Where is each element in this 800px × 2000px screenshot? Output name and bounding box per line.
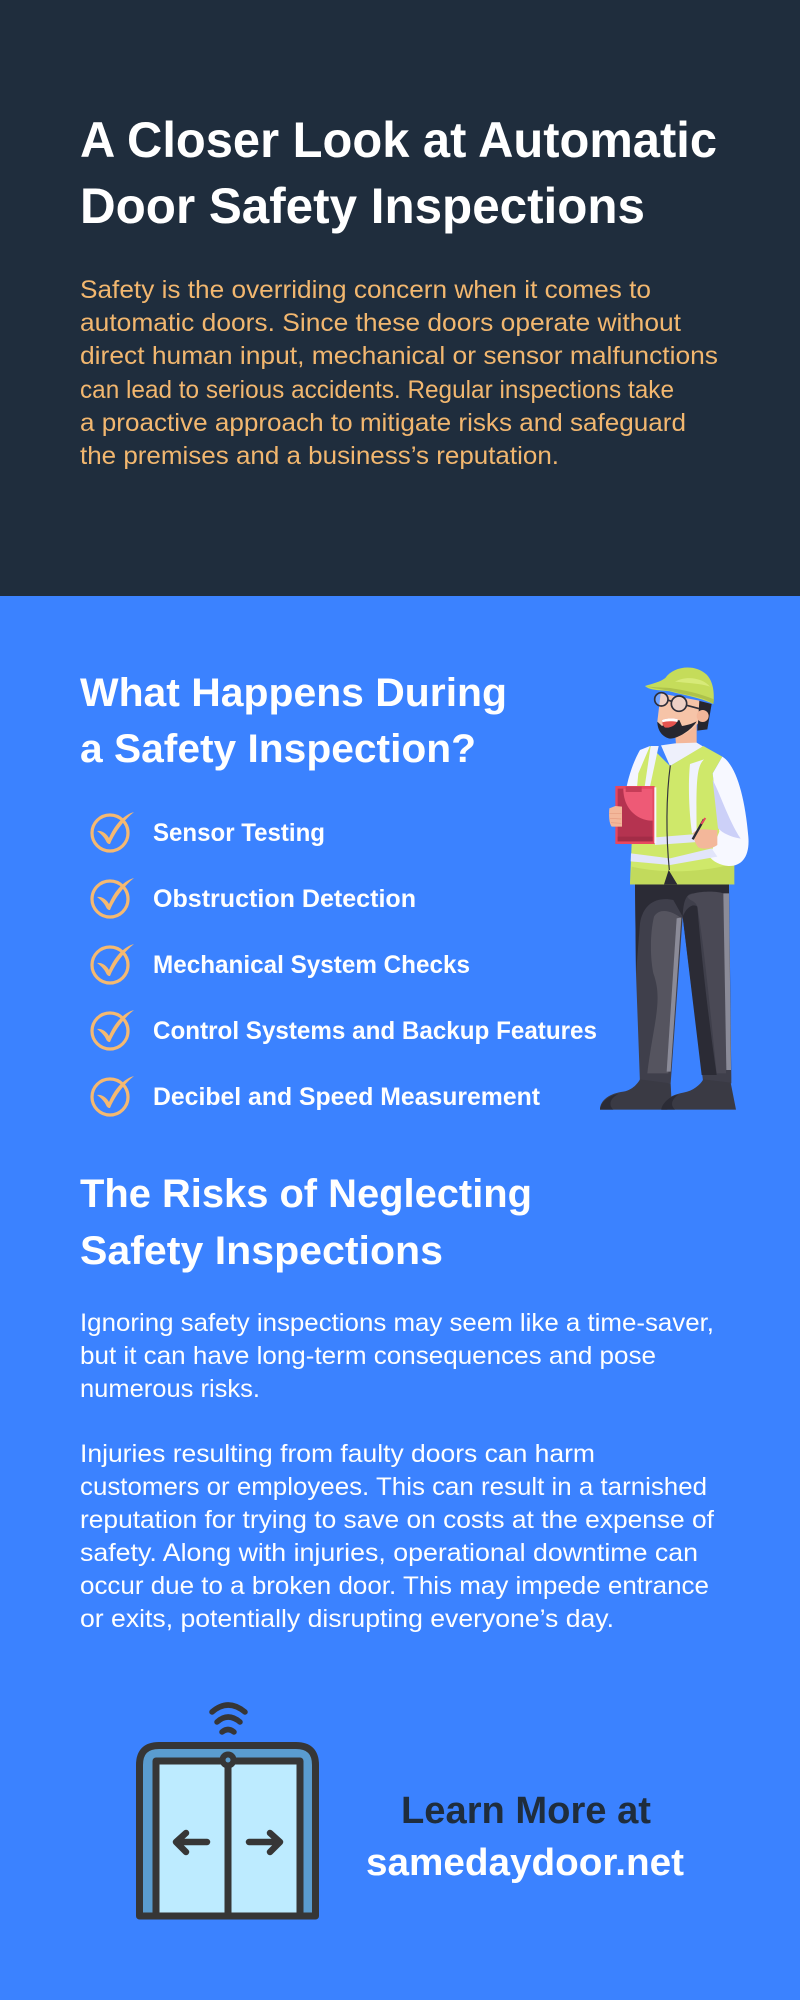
- heading: risks: [80, 1172, 532, 1273]
- item: control systems: Control Systems and Backup Features: [153, 1017, 597, 1045]
- checklist: [92, 812, 597, 1115]
- body paragraph: intro to risks: but it can have long-term consequences and pose: [80, 1342, 656, 1370]
- item: decibel and speed: Decibel and Speed Measurement: [153, 1083, 541, 1111]
- legs: [635, 884, 731, 1083]
- body paragraph: intro to risks: Ignoring safety inspections may seem like a time-saver,: [80, 1309, 714, 1337]
- right sleeve: [709, 757, 749, 866]
- item: mechanical system checks: Mechanical System Checks: [153, 951, 470, 979]
- item: sensor testing: Sensor Testing: [153, 819, 325, 847]
- body paragraph: injuries and downtime: or exits, potentially disrupting everyone’s day.: [80, 1605, 614, 1633]
- call to action: samedaydoor.net: [366, 1842, 684, 1884]
- clipboard: [615, 786, 655, 844]
- intro paragraph: a proactive approach to mitigate risks and safeguard: [80, 409, 686, 437]
- glasses: [655, 693, 699, 711]
- intro paragraph: automatic doors. Since these doors operate without: [80, 309, 681, 337]
- heading: what happens: What Happens During: [80, 671, 507, 715]
- intro paragraph: the premises and a business’s reputation.: [80, 442, 559, 470]
- panel: dark header: [0, 0, 800, 596]
- heading: risks: The Risks of Neglecting: [80, 1172, 532, 1216]
- heading: what happens: [80, 671, 507, 771]
- heading: what happens: a Safety Inspection?: [80, 727, 476, 771]
- title: Door Safety Inspections: [80, 178, 645, 234]
- illustration: inspector with clipboard: [600, 667, 749, 1110]
- item: obstruction detection: Obstruction Detection: [153, 885, 416, 913]
- hands: [609, 806, 622, 827]
- collar: [661, 743, 703, 766]
- intro paragraph: [80, 276, 718, 470]
- intro paragraph: can lead to serious accidents. Regular inspections take: [80, 376, 674, 404]
- body paragraph: intro to risks: [80, 1309, 714, 1403]
- item: mechanical system checks: [92, 944, 470, 983]
- item: sensor testing: [92, 812, 325, 851]
- vest: [630, 746, 734, 884]
- call to action: [366, 1790, 684, 1884]
- beard: [657, 720, 697, 739]
- body paragraph: injuries and downtime: occur due to a broken door. This may impede entrance: [80, 1572, 709, 1600]
- icon: automatic door with wifi: [140, 1705, 316, 1916]
- item: control systems: [92, 1010, 597, 1049]
- body paragraph: intro to risks: numerous risks.: [80, 1375, 260, 1403]
- title: A Closer Look at Automatic: [80, 112, 717, 168]
- helmet: [645, 667, 714, 704]
- body paragraph: injuries and downtime: reputation for trying to save on costs at the expense of: [80, 1506, 714, 1534]
- item: decibel and speed: [92, 1076, 541, 1115]
- seam: [667, 765, 670, 870]
- heading: risks: Safety Inspections: [80, 1229, 443, 1273]
- call to action: Learn More at: [401, 1790, 651, 1832]
- title: [80, 112, 717, 234]
- arrow: left: [176, 1833, 207, 1852]
- body paragraph: injuries and downtime: customers or employees. This can result in a tarnished: [80, 1473, 707, 1501]
- hair: [697, 701, 712, 731]
- arrow: right: [249, 1833, 280, 1852]
- mouth: [662, 718, 678, 728]
- intro paragraph: Safety is the overriding concern when it comes to: [80, 276, 651, 304]
- reflective strips: [645, 746, 704, 833]
- body paragraph: injuries and downtime: [80, 1440, 714, 1633]
- item: obstruction detection: [92, 878, 416, 917]
- neck: [675, 723, 697, 753]
- shoes: [600, 1079, 671, 1110]
- body paragraph: injuries and downtime: safety. Along with injuries, operational downtime can: [80, 1539, 698, 1567]
- left sleeve: [626, 746, 650, 790]
- body paragraph: injuries and downtime: Injuries resulting from faulty doors can harm: [80, 1440, 595, 1468]
- icon: wifi: [212, 1705, 245, 1732]
- intro paragraph: direct human input, mechanical or sensor malfunctions: [80, 342, 718, 370]
- face: [657, 693, 699, 737]
